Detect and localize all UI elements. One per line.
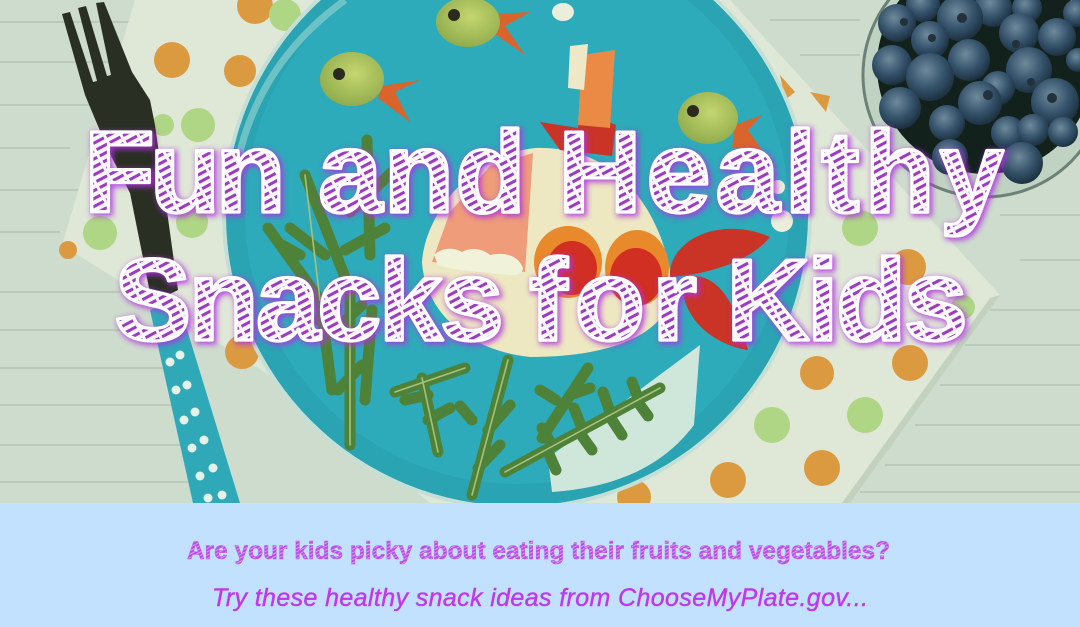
cream trim [434,249,523,275]
carrot mast and sail [568,44,615,128]
caption question: Are your kids picky about eating their fruits and vegetables? [187,537,890,565]
title hatched lettering: for [529,235,697,365]
title glow: for [531,237,699,367]
napkin [59,0,1000,514]
title glow [86,109,1006,367]
title glow: Kids [728,237,970,367]
title glow: and [320,109,528,239]
arugula leaves [268,140,660,495]
caption panel [0,503,1080,627]
pepper windows [534,226,669,306]
orange napkin dots [59,0,928,514]
salmon sail [432,153,533,272]
title glow: Healthy [560,109,1006,239]
grape fish [320,0,793,232]
fork [62,2,240,503]
title hatched lettering: Healthy [558,107,1004,237]
cheese boat [422,148,673,357]
title hatched lettering: Snacks [114,235,504,365]
title glow: Fun [86,109,288,239]
caption invitation: Try these healthy snack ideas from ChooseMyPlate.gov... [212,584,868,612]
title hatched lettering: Kids [726,235,968,365]
title [84,107,1006,367]
blueberry bowl [863,0,1080,197]
green napkin dots [83,0,975,443]
title hatched lettering: and [318,107,526,237]
red pepper slices [540,110,770,350]
title hatched lettering [84,107,1004,365]
title glow: Snacks [116,237,506,367]
plate [222,0,812,510]
title hatched lettering: Fun [84,107,286,237]
